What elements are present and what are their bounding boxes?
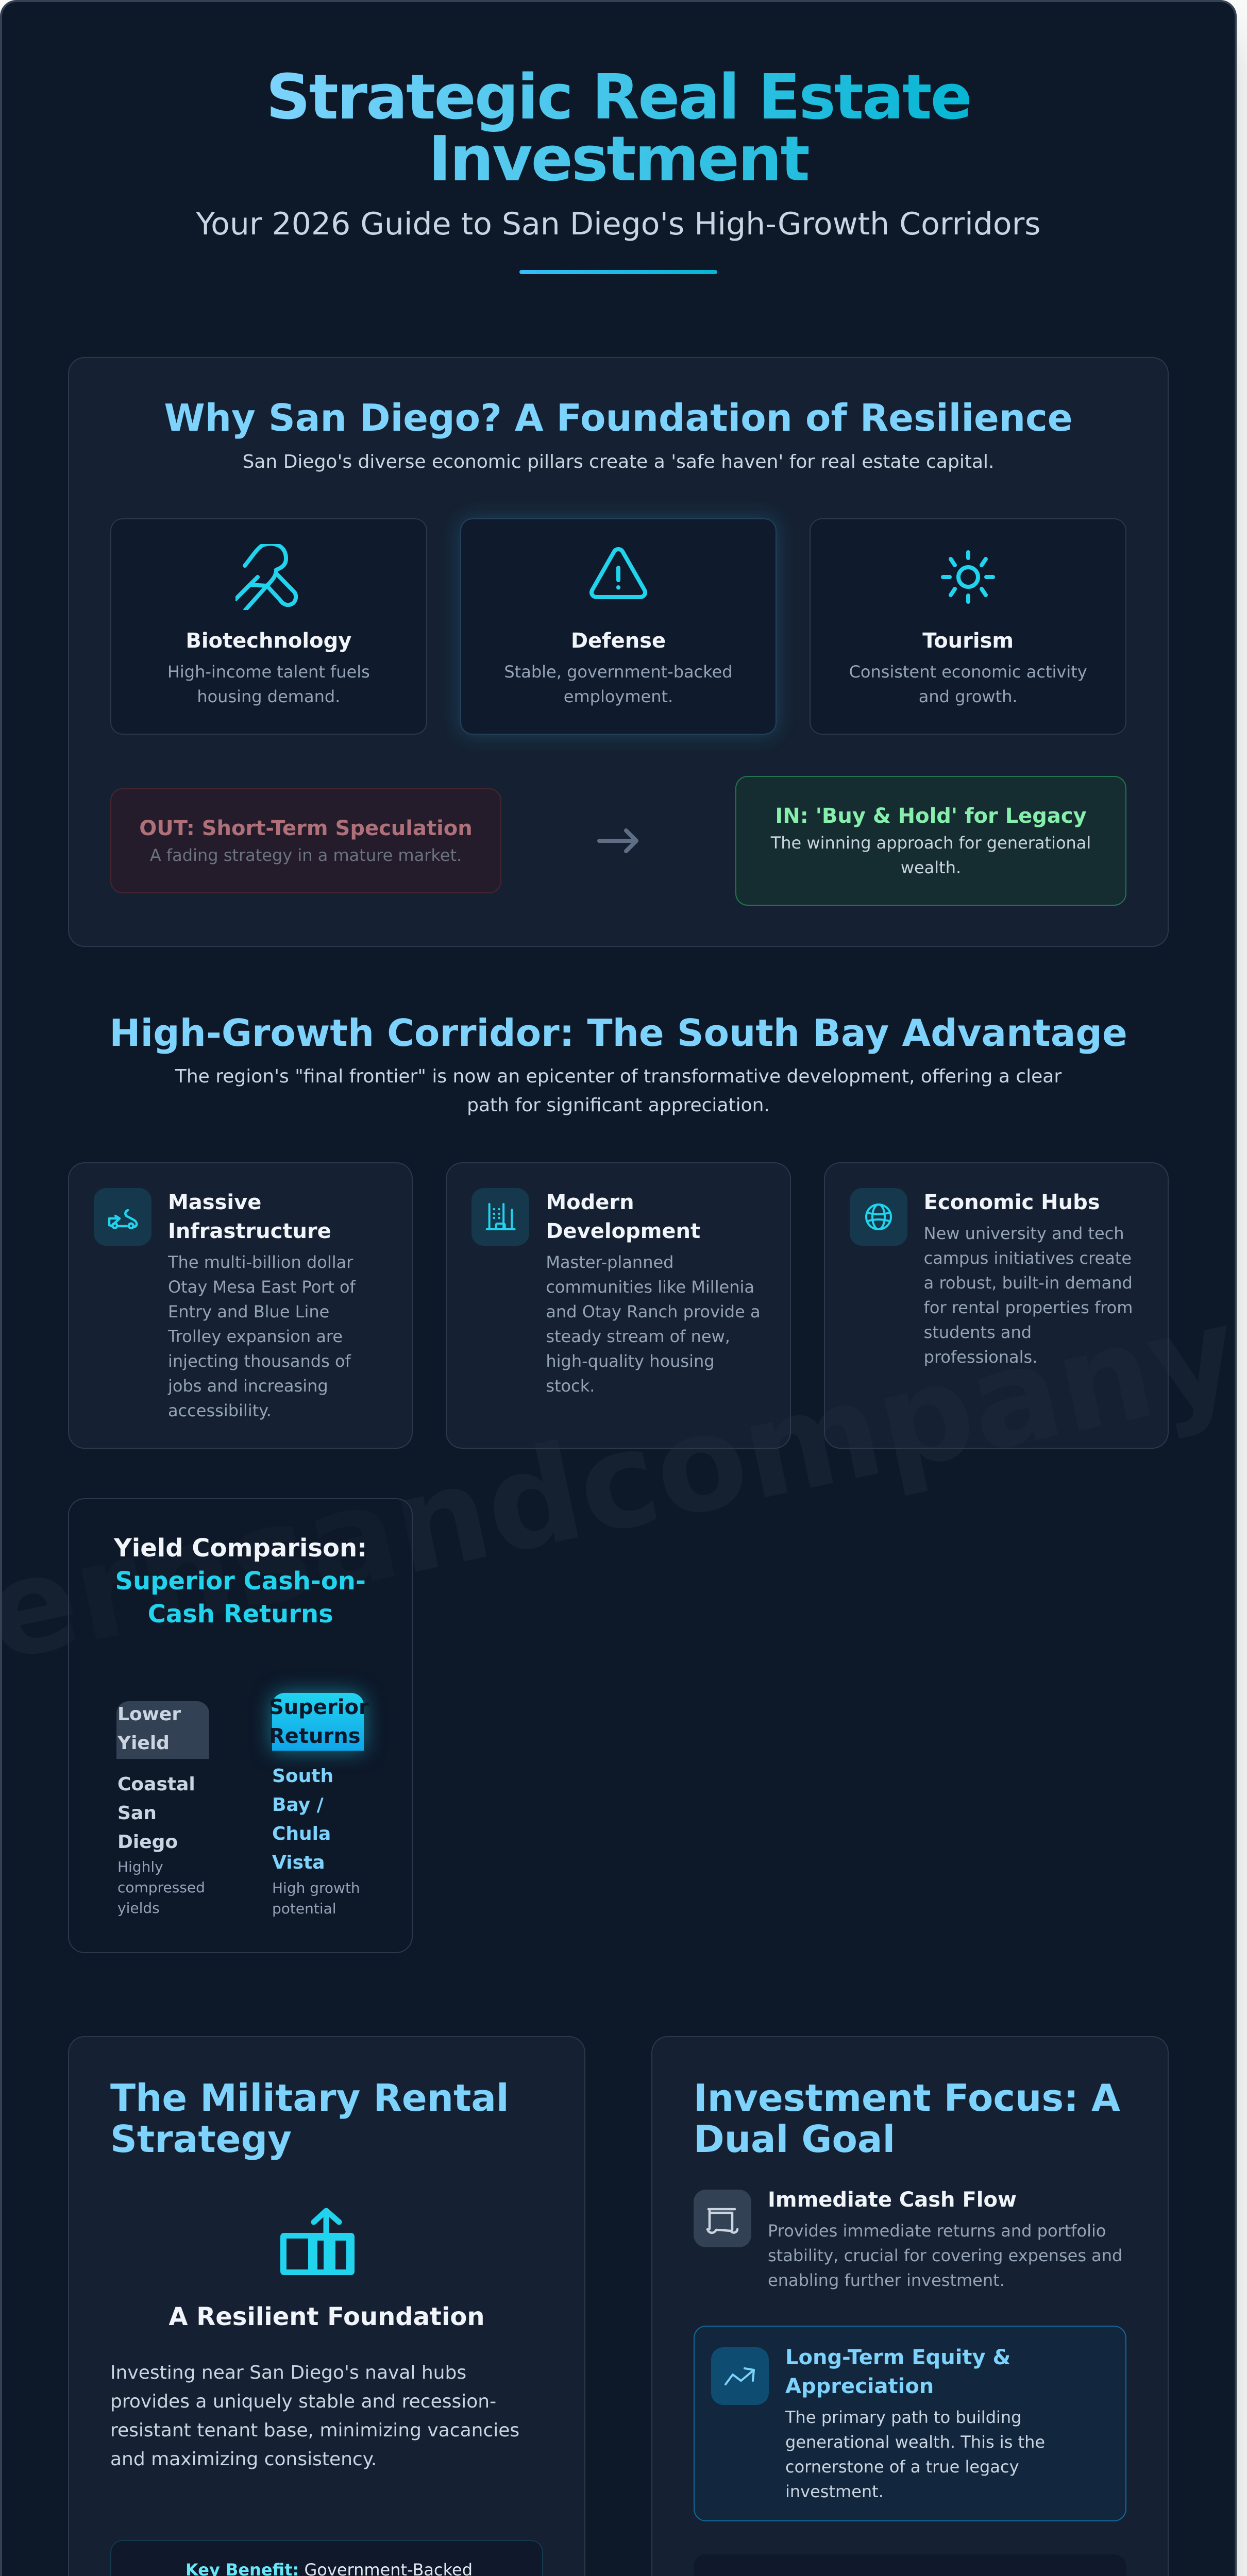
- icon: globe: [850, 1188, 907, 1246]
- corridor intro text: The region's "final frontier" is now an epicenter of transformative development, offering a clear: [175, 1066, 1061, 1087]
- icon: warning triangle: [589, 547, 647, 599]
- card description: Trolley expansion are: [168, 1327, 343, 1346]
- card description: and Otay Ranch provide a: [546, 1302, 761, 1321]
- heading: military rental: [110, 2077, 509, 2160]
- note: coastal: [117, 1857, 205, 1919]
- card: massive infrastructure: [68, 1162, 413, 1449]
- note: South Bay: [272, 1878, 360, 1919]
- corridor intro text: [175, 1066, 1061, 1116]
- callout: long-term equity: [694, 2326, 1126, 2521]
- card title: Defense: [571, 629, 666, 653]
- panel: military rental strategy: [68, 2036, 585, 2576]
- card description: and growth.: [919, 687, 1018, 706]
- card title: [546, 1191, 700, 1243]
- panel: investment focus: [651, 2036, 1169, 2576]
- note: South Bay: High growth: [272, 1879, 360, 1896]
- card description: Consistent economic activity: [849, 662, 1087, 682]
- corridor intro text: path for significant appreciation.: [467, 1095, 770, 1116]
- chart title: Yield Comparison:: [114, 1534, 367, 1563]
- out title: OUT: Short-Term Speculation: [139, 817, 473, 840]
- icon: cash flow: [694, 2190, 751, 2247]
- callout: in: [735, 776, 1126, 906]
- label: South Bay: South: [272, 1765, 333, 1787]
- card description: students and: [924, 1323, 1032, 1342]
- bar label: [269, 1693, 369, 1751]
- card description: accessibility.: [168, 1401, 272, 1420]
- card description: High-income talent fuels: [167, 662, 370, 682]
- subheading: A Resilient Foundation: [168, 2302, 485, 2331]
- callout: out: [110, 788, 501, 893]
- card title: Modern: [546, 1191, 634, 1214]
- heading: military rental: Strategy: [110, 2117, 292, 2161]
- card title: Economic Hubs: [924, 1191, 1100, 1214]
- icon: building: [471, 1188, 529, 1246]
- card description: stock.: [546, 1376, 595, 1396]
- card title: Infrastructure: [168, 1219, 331, 1243]
- icon: trending up: [711, 2347, 769, 2405]
- bar label: Yield: [117, 1732, 170, 1754]
- card description: campus initiatives create: [924, 1248, 1132, 1268]
- chart title: [113, 1534, 367, 1629]
- intro text: San Diego's diverse economic pillars create a 'safe haven' for real estate capital.: [243, 451, 994, 472]
- card: biotechnology: [110, 518, 427, 735]
- card description: jobs and increasing: [168, 1376, 328, 1396]
- card: economic hubs: [824, 1162, 1169, 1449]
- callout: balanced strategy: [694, 2554, 1126, 2576]
- note: coastal: yields: [117, 1900, 160, 1917]
- card title: [168, 1191, 331, 1243]
- heading: investment focus: [694, 2077, 1120, 2160]
- cash flow description: Provides immediate returns and portfolio: [768, 2221, 1106, 2241]
- label: South Bay: Chula: [272, 1823, 331, 1844]
- card description: Master-planned: [546, 1252, 673, 1272]
- chart title: Superior Cash-on-: [115, 1567, 366, 1596]
- card description: high-quality housing: [546, 1351, 715, 1371]
- label: coastal San Diego: San: [117, 1802, 157, 1824]
- paragraph: Investing near San Diego's naval hubs: [110, 2362, 466, 2383]
- card description: for rental properties from: [924, 1298, 1133, 1317]
- in description: wealth.: [901, 858, 961, 877]
- heading: investment focus: Investment Focus: A: [694, 2076, 1120, 2120]
- label: coastal San Diego: [117, 1770, 195, 1857]
- panel: yield comparison: [68, 1498, 413, 1953]
- in description: The winning approach for generational: [771, 833, 1091, 853]
- cash flow description: [768, 2218, 1122, 2293]
- card description: communities like Millenia: [546, 1277, 754, 1297]
- card description: [849, 662, 1087, 706]
- card title: Tourism: [922, 629, 1014, 653]
- card title: Development: [546, 1219, 700, 1243]
- card description: Entry and Blue Line: [168, 1302, 329, 1321]
- card description: a robust, built-in demand: [924, 1273, 1133, 1293]
- card description: [504, 662, 733, 706]
- bar: lower yield: [116, 1701, 209, 1759]
- icon: biotechnology: [235, 544, 298, 610]
- heading: military rental: The Military Rental: [110, 2076, 509, 2120]
- paragraph: [110, 2359, 519, 2474]
- heading: high-growth corridor: High-Growth Corridor: The South Bay Advantage: [109, 1011, 1127, 1055]
- card: tourism: [810, 518, 1126, 735]
- arrow: [597, 828, 638, 853]
- card description: professionals.: [924, 1347, 1037, 1367]
- card title: Massive: [168, 1191, 261, 1214]
- long-term description: [785, 2405, 1045, 2504]
- label: South Bay: Bay /: [272, 1794, 324, 1816]
- bar label: Returns: [269, 1724, 361, 1748]
- panel: why San Diego: [68, 357, 1169, 947]
- heading: why San Diego: Why San Diego? A Foundation of Resilience: [164, 396, 1073, 439]
- card description: [167, 662, 370, 706]
- long-term description: investment.: [785, 2482, 884, 2501]
- title: Strategic Real Estate: [266, 62, 971, 133]
- card description: [546, 1252, 761, 1396]
- card description: [924, 1224, 1133, 1367]
- note: coastal: compressed: [117, 1879, 205, 1896]
- icon: foundation with arrow: [280, 2205, 355, 2277]
- cash flow description: stability, crucial for covering expenses and: [768, 2246, 1122, 2265]
- icon: sun: [941, 550, 995, 604]
- header divider: [519, 270, 717, 274]
- long-term description: generational wealth. This is the: [785, 2432, 1045, 2452]
- long-term description: cornerstone of a true legacy: [785, 2457, 1019, 2477]
- title: [265, 67, 971, 191]
- paragraph: and maximizing consistency.: [110, 2448, 377, 2470]
- label: South Bay: [272, 1762, 333, 1877]
- card description: steady stream of new,: [546, 1327, 730, 1346]
- bar: superior returns: [272, 1693, 364, 1751]
- card description: employment.: [564, 687, 673, 706]
- card description: Stable, government-backed: [504, 662, 733, 682]
- cash flow title: Immediate Cash Flow: [768, 2188, 1017, 2212]
- card description: The multi-billion dollar: [168, 1252, 353, 1272]
- cash flow description: enabling further investment.: [768, 2270, 1005, 2290]
- bar label: Superior: [269, 1696, 369, 1719]
- callout: key benefit: [110, 2540, 543, 2576]
- card title: Biotechnology: [186, 629, 351, 653]
- label: coastal San Diego: Coastal: [117, 1773, 195, 1795]
- card description: New university and tech: [924, 1224, 1124, 1243]
- subtitle: Your 2026 Guide to San Diego's High-Growth Corridors: [196, 206, 1041, 242]
- note: South Bay: potential: [272, 1900, 336, 1917]
- title: Investment: [428, 124, 808, 195]
- in title: IN: 'Buy & Hold' for Legacy: [775, 804, 1087, 828]
- card description: housing demand.: [197, 687, 340, 706]
- card description: [167, 1252, 356, 1420]
- label: South Bay: Vista: [272, 1852, 325, 1873]
- icon: vehicle: [94, 1188, 151, 1246]
- out description: A fading strategy in a mature market.: [150, 845, 462, 865]
- card description: injecting thousands of: [168, 1351, 351, 1371]
- in description: [771, 833, 1091, 877]
- long-term title: [785, 2343, 1010, 2401]
- long-term title: Long-Term Equity &: [785, 2346, 1010, 2369]
- card: modern development: [446, 1162, 791, 1449]
- long-term description: The primary path to building: [785, 2408, 1021, 2427]
- card description: Otay Mesa East Port of: [168, 1277, 356, 1297]
- bar label: [117, 1703, 181, 1754]
- long-term title: Appreciation: [785, 2375, 934, 2398]
- bar label: Lower: [117, 1703, 181, 1725]
- card: defense: [460, 518, 777, 735]
- paragraph: provides a uniquely stable and recession-: [110, 2391, 496, 2412]
- paragraph: resistant tenant base, minimizing vacancies: [110, 2419, 519, 2441]
- note: coastal: Highly: [117, 1858, 163, 1875]
- label: coastal San Diego: Diego: [117, 1831, 178, 1853]
- chart title: Cash Returns: [148, 1600, 333, 1629]
- heading: investment focus: Dual Goal: [694, 2117, 895, 2161]
